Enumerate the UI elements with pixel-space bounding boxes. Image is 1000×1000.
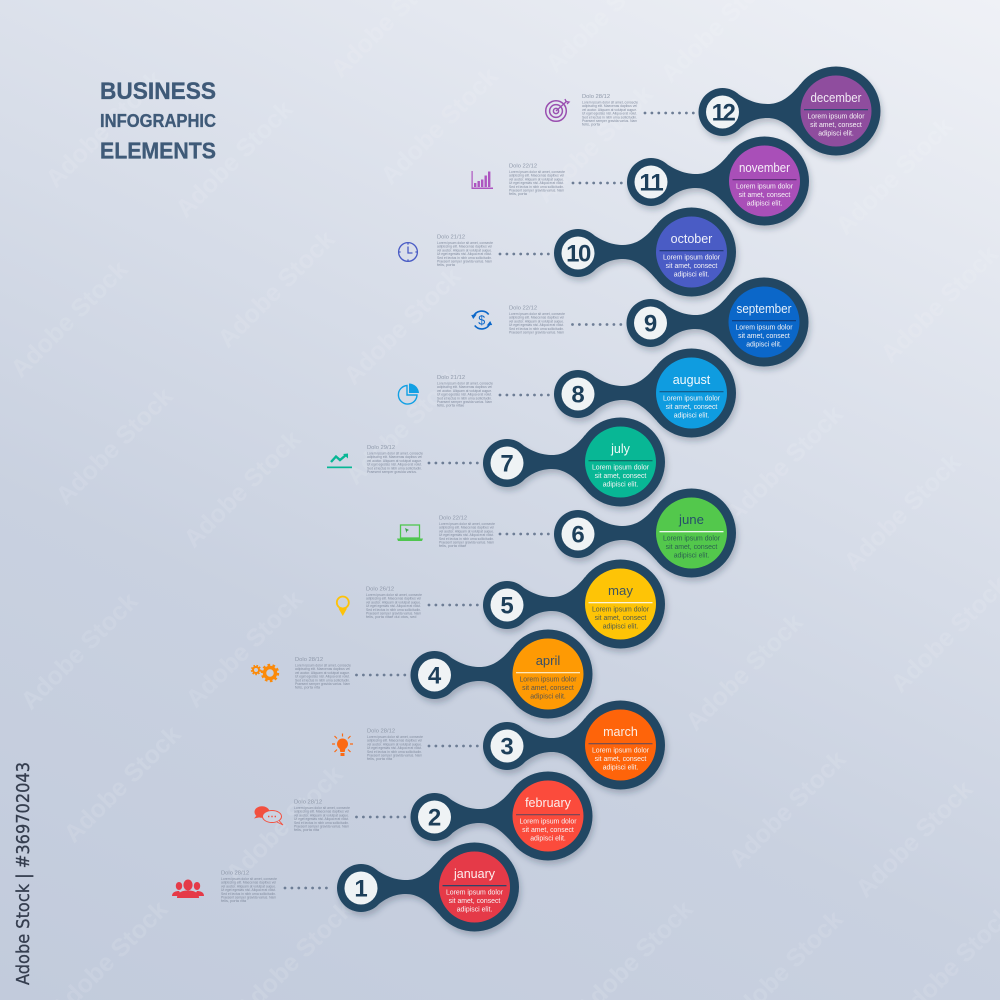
- step 5 text: vel auctor. Aliquam at volutpat augue.: [366, 599, 421, 604]
- step 4 text: Lorem ipsum dolor sit amet, consecte: [295, 662, 351, 668]
- step 6 text: vel auctor. Aliquam at volutpat augue.: [439, 528, 494, 533]
- step 1: january: 1: [354, 876, 368, 902]
- step 7 text: adipiscing elit. Maecenas dapibus vel: [367, 454, 422, 459]
- icon: pie chart: [398, 384, 419, 404]
- step 12 text: vel auctor. Aliquam at volutpat augue.: [582, 107, 637, 112]
- text: Adobe Stock: [875, 240, 1000, 368]
- step 6: june: [500, 488, 736, 578]
- step 9: september: Lorem ipsum dolor: [735, 324, 793, 332]
- step 3: march: Lorem ipsum dolor: [592, 748, 650, 754]
- step 7: july: july: [610, 442, 631, 456]
- step 5 text: Ut eget egestas nisl. Aliqua erat volut.: [366, 603, 421, 608]
- step 7 text: Lorem ipsum dolor sit amet, consecte: [367, 450, 423, 456]
- step 10: october: adipisci elit.: [674, 272, 709, 278]
- step 1 text: vel auctor. Aliquam at volutpat augue.: [221, 883, 276, 888]
- text: Adobe Stock: [530, 80, 658, 208]
- step 2: february: Lorem ipsum dolor: [519, 818, 577, 826]
- step 8 text: vel auctor. Aliquam at volutpat augue.: [437, 388, 492, 393]
- step 4: april: adipisci elit.: [530, 694, 566, 700]
- icon: light bulb: [332, 734, 353, 756]
- step 3 text: felis, porta vita: [367, 756, 393, 761]
- text: Adobe Stock: [212, 225, 340, 353]
- step 12 text: felis, porta: [582, 122, 601, 127]
- step 7: july: adipisci elit.: [603, 482, 638, 488]
- step 4 text: Dolo 28/12: [295, 657, 323, 663]
- text: Adobe Stock: [850, 775, 978, 903]
- step 8: august: adipisci elit.: [674, 412, 709, 420]
- step 11: november: adipisci elit.: [747, 200, 782, 208]
- step 6: june: Lorem ipsum dolor: [663, 536, 721, 542]
- step 7: july: [429, 418, 665, 506]
- title: BUSINESS: [100, 78, 216, 105]
- step 3 text: [367, 728, 423, 761]
- step 9: september: [572, 278, 808, 366]
- icon: dollar cycle: $: [478, 314, 485, 328]
- step 4 text: Praesent semper gravida varius. Nam: [295, 681, 350, 686]
- step 10: october: [500, 208, 736, 296]
- step 12: december: 12: [712, 100, 735, 126]
- title: ELEMENTS: [100, 138, 216, 164]
- step 8: august: [500, 348, 736, 438]
- step 10 text: Praesent semper gravida varius. Nam: [437, 258, 492, 264]
- step 5: may: sit amet, consect: [595, 615, 646, 622]
- step 3: march: [429, 700, 665, 790]
- step 12 text: Praesent semper gravida varius. Nam: [582, 118, 637, 123]
- step 11 text: adipiscing elit. Maecenas dapibus vel: [509, 173, 564, 178]
- step 10: october: Lorem ipsum dolor: [663, 254, 721, 262]
- step 1: january: [285, 842, 519, 932]
- step 6: june: sit amet, consect: [666, 544, 717, 551]
- step 4: april: sit amet, consect: [522, 685, 574, 692]
- step 6 text: felis, porta vitae: [439, 543, 466, 548]
- step 10 text: adipiscing elit. Maecenas dapibus vel: [437, 244, 492, 249]
- step 5: may: adipisci elit.: [603, 624, 638, 630]
- step 9: september: 9: [644, 310, 657, 338]
- step 6 text: [439, 516, 495, 548]
- step 5 text: Praesent semper gravida varius. Nam: [366, 610, 421, 616]
- step 5 text: Lorem ipsum dolor sit amet, consecte: [366, 592, 422, 597]
- step 3: march: 3: [500, 734, 514, 760]
- step 9 text: vel auctor. Aliquam at volutpat augue.: [509, 318, 564, 323]
- text: Adobe Stock: [15, 587, 143, 715]
- step 8 text: Dolo 21/12: [437, 375, 465, 381]
- step 1: january: adipisci elit.: [457, 906, 492, 914]
- step 3: march: adipisci elit.: [603, 764, 638, 772]
- step 1 text: Sed et lectus in nibh urna sollicitudin.: [221, 891, 276, 896]
- step 8 text: Lorem ipsum dolor sit amet, consecte: [437, 380, 493, 386]
- step 6 text: Praesent semper gravida varius. Nam: [439, 540, 494, 544]
- step 5 text: adipiscing elit. Maecenas dapibus vel: [366, 596, 421, 601]
- step 12 text: Lorem ipsum dolor sit amet, consecte: [582, 100, 638, 104]
- step 6 text: Ut eget egestas nisl. Aliqua erat volut.: [439, 532, 494, 537]
- step 5 text: felis, porta vitae dui otos, sed: [366, 614, 416, 619]
- step 2 text: Ut eget egestas nisl. Aliqua erat volut.: [294, 816, 349, 821]
- step 9 text: [509, 306, 565, 334]
- text: Adobe Stock: [58, 720, 186, 848]
- step 7: july: Lorem ipsum dolor: [592, 464, 650, 472]
- step 7 text: Praesent semper gravida varius.: [367, 469, 417, 474]
- step 7 text: Sed et lectus in nibh urna sollicitudin.: [367, 465, 422, 470]
- text: Adobe Stock: [5, 255, 133, 383]
- step 11 text: Praesent semper gravida varius. Nam: [509, 188, 564, 192]
- step 1: january: Lorem ipsum dolor: [446, 890, 504, 896]
- step 3 text: Praesent semper gravida varius. Nam: [367, 752, 422, 758]
- step 10 text: [437, 234, 493, 267]
- icon: laptop: [397, 525, 423, 541]
- step 8 text: Ut eget egestas nisl. Aliqua erat volut.: [437, 392, 492, 397]
- icon: clock: [399, 243, 417, 261]
- step 9: september: september: [736, 302, 792, 316]
- step 4: april: april: [536, 653, 560, 668]
- step 4 text: [295, 657, 351, 690]
- step 12 text: [582, 94, 638, 127]
- step 10 text: Ut eget egestas nisl. Aliqua erat volut.: [437, 251, 492, 256]
- step 6 text: Lorem ipsum dolor sit amet, consecte: [439, 521, 495, 526]
- step 12: december: adipisci elit.: [818, 130, 854, 138]
- step 1 text: adipiscing elit. Maecenas dapibus vel: [221, 880, 276, 885]
- step 4 text: Sed et lectus in nibh urna sollicitudin.: [295, 677, 350, 682]
- step 6: june: june: [678, 512, 704, 527]
- step 8: august: august: [673, 373, 711, 387]
- step 8 text: felis, porta vitae: [437, 403, 464, 408]
- step 3 text: Lorem ipsum dolor sit amet, consecte: [367, 734, 423, 739]
- step 9 text: Lorem ipsum dolor sit amet, consecte: [509, 311, 565, 316]
- step 3: march: sit amet, consect: [595, 756, 646, 763]
- step 10 text: vel auctor. Aliquam at volutpat augue.: [437, 247, 492, 252]
- step 11: november: Lorem ipsum dolor: [736, 184, 794, 190]
- step 7 text: Dolo 29/12: [367, 445, 395, 451]
- step 10: october: sit amet, consect: [666, 263, 717, 270]
- step 7: july: 7: [500, 450, 514, 478]
- step 2: february: 2: [428, 804, 441, 832]
- step 7 text: [367, 445, 423, 474]
- step 1 text: Lorem ipsum dolor sit amet, consecte: [221, 876, 277, 881]
- step 10: october: 10: [566, 240, 591, 268]
- step 2 text: felis, porta vita: [294, 827, 320, 832]
- step 11 text: Ut eget egestas nisl. Aliqua erat volut.: [509, 180, 564, 185]
- step 2: february: adipisci elit.: [530, 836, 566, 842]
- icon: bar chart: [472, 171, 493, 189]
- step 10: october: october: [671, 232, 712, 246]
- step 11 text: vel auctor. Aliquam at volutpat augue.: [509, 176, 564, 181]
- step 1 text: Dolo 28/12: [221, 870, 249, 876]
- text: Adobe Stock: [720, 400, 848, 528]
- step 8: august: Lorem ipsum dolor: [663, 396, 721, 402]
- step 11 text: Dolo 22/12: [509, 164, 537, 170]
- stock id label: Adobe Stock | #369702043: [13, 762, 34, 985]
- step 9 text: Sed et lectus in nibh urna sollicitudin.: [509, 326, 564, 331]
- step 3 text: Ut eget egestas nisl. Aliqua erat volut.: [367, 745, 422, 750]
- title: INFOGRAPHIC: [100, 110, 216, 131]
- step 4 text: adipiscing elit. Maecenas dapibus vel: [295, 666, 350, 671]
- step 8 text: adipiscing elit. Maecenas dapibus vel: [437, 384, 492, 389]
- step 4: april: [356, 630, 592, 718]
- step 3 text: vel auctor. Aliquam at volutpat augue.: [367, 741, 422, 746]
- step 8: august: 8: [571, 382, 585, 408]
- step 6: june: 6: [571, 522, 585, 548]
- step 6 text: Dolo 22/12: [439, 516, 467, 522]
- step 2 text: vel auctor. Aliquam at volutpat augue.: [294, 812, 349, 817]
- step 5 text: Dolo 26/12: [366, 586, 394, 592]
- step 7 text: Ut eget egestas nisl. Aliqua erat volut.: [367, 462, 422, 467]
- step 1: january: sit amet, consect: [449, 898, 500, 905]
- step 2 text: Praesent semper gravida varius. Nam: [294, 824, 349, 828]
- icon: dollar cycle: [471, 311, 492, 329]
- text: Adobe Stock: [170, 95, 298, 223]
- icon: map pin: [337, 596, 349, 616]
- text: Adobe Stock: [723, 745, 851, 873]
- step 11: november: november: [739, 161, 790, 175]
- step 8 text: Sed et lectus in nibh urna sollicitudin.: [437, 395, 492, 400]
- step 10 text: Sed et lectus in nibh urna sollicitudin.: [437, 255, 492, 260]
- step 12: december: Lorem ipsum dolor: [807, 114, 865, 120]
- step 1 text: [221, 870, 277, 903]
- step 5: may: [429, 560, 665, 648]
- step 2: february: february: [525, 796, 572, 810]
- step 1 text: felis, porta vita: [221, 898, 247, 903]
- text: Adobe Stock: [50, 382, 178, 510]
- step 9 text: Praesent semper gravida varius. Nam: [509, 330, 564, 334]
- step 4 text: vel auctor. Aliquam at volutpat augue.: [295, 670, 350, 675]
- step 8 text: [437, 375, 493, 408]
- text: Adobe Stock: [220, 760, 348, 888]
- step 11: november: sit amet, consect: [739, 192, 790, 199]
- step 1 text: Praesent semper gravida varius. Nam: [221, 894, 276, 900]
- step 10 text: felis, porta: [437, 262, 456, 267]
- step 3 text: Sed et lectus in nibh urna sollicitudin.: [367, 749, 422, 754]
- step 9 text: adipiscing elit. Maecenas dapibus vel: [509, 315, 564, 320]
- step 11: november: 11: [639, 170, 663, 196]
- step 11 text: Lorem ipsum dolor sit amet, consecte: [509, 169, 565, 174]
- step 12 text: adipiscing elit. Maecenas dapibus vel: [582, 103, 637, 108]
- step 3 text: adipiscing elit. Maecenas dapibus vel: [367, 738, 422, 743]
- text: Adobe Stock: [830, 112, 958, 240]
- step 5: may: 5: [500, 592, 514, 620]
- step 7 text: vel auctor. Aliquam at volutpat augue.: [367, 458, 422, 463]
- text: Adobe Stock: [180, 585, 308, 713]
- step 6 text: Sed et lectus in nibh urna sollicitudin.: [439, 536, 494, 541]
- step 10 text: Lorem ipsum dolor sit amet, consecte: [437, 240, 493, 245]
- icon: target: [546, 99, 569, 121]
- step 2: february: sit amet, consect: [522, 827, 574, 834]
- step 4 text: felis, porta vita: [295, 685, 321, 690]
- text: Adobe Stock: [338, 262, 466, 390]
- step 10 text: Dolo 21/12: [437, 234, 465, 240]
- text: Adobe Stock: [40, 65, 168, 193]
- step 8: august: sit amet, consect: [666, 404, 717, 411]
- step 12: december: december: [810, 91, 862, 105]
- step 2 text: [294, 800, 350, 832]
- icon: speech bubbles: [254, 806, 283, 825]
- step 1: january: january: [453, 867, 496, 881]
- text: Adobe Stock: [178, 425, 306, 553]
- step 8 text: Praesent semper gravida varius. Nam: [437, 399, 492, 404]
- step 11: november: [573, 136, 809, 226]
- step 5 text: [366, 586, 422, 619]
- step 3: march: march: [603, 725, 638, 739]
- text: Adobe Stock: [838, 448, 966, 576]
- text: Adobe Stock: [375, 62, 503, 190]
- step 2 text: adipiscing elit. Maecenas dapibus vel: [294, 809, 349, 814]
- step 1 text: Ut eget egestas nisl. Aliqua erat volut.: [221, 887, 276, 892]
- step 4: april: Lorem ipsum dolor: [519, 676, 577, 684]
- text: Adobe Stock: [680, 608, 808, 736]
- step 5 text: Sed et lectus in nibh urna sollicitudin.: [366, 607, 421, 612]
- step 11 text: felis, porta: [509, 191, 528, 196]
- step 11 text: [509, 164, 565, 196]
- text: Adobe Stock: [340, 362, 468, 490]
- step 12 text: Ut eget egestas nisl. Aliqua erat volut.: [582, 111, 637, 116]
- step 9 text: Ut eget egestas nisl. Aliqua erat volut.: [509, 322, 564, 327]
- step 7: july: sit amet, consect: [595, 473, 646, 480]
- step 2 text: Dolo 28/12: [294, 800, 322, 806]
- step 6: june: adipisci elit.: [674, 552, 709, 560]
- step 2: february: [356, 772, 592, 860]
- step 9: september: sit amet, consect: [738, 333, 790, 340]
- step 5: may: Lorem ipsum dolor: [592, 606, 650, 614]
- icon: gears: [252, 665, 278, 681]
- step 5: may: may: [608, 583, 633, 598]
- step 12 text: Sed et lectus in nibh urna sollicitudin.: [582, 114, 637, 119]
- step 9 text: Dolo 22/12: [509, 306, 537, 312]
- step 12: december: [645, 66, 880, 156]
- step 6 text: adipiscing elit. Maecenas dapibus vel: [439, 525, 494, 530]
- icon: trend line: [327, 454, 352, 468]
- step 11 text: Sed et lectus in nibh urna sollicitudin.: [509, 184, 564, 189]
- step 2 text: Sed et lectus in nibh urna sollicitudin.: [294, 820, 349, 825]
- step 3 text: Dolo 28/12: [367, 728, 395, 734]
- icon: people: [172, 880, 204, 898]
- step 4 text: Ut eget egestas nisl. Aliqua erat volut.: [295, 674, 350, 679]
- step 12: december: sit amet, consect: [810, 122, 862, 129]
- step 9: september: adipisci elit.: [746, 342, 782, 348]
- title: [100, 78, 216, 164]
- step 2 text: Lorem ipsum dolor sit amet, consecte: [294, 805, 350, 810]
- step 12 text: Dolo 28/12: [582, 94, 610, 100]
- step 4: april: 4: [428, 662, 442, 690]
